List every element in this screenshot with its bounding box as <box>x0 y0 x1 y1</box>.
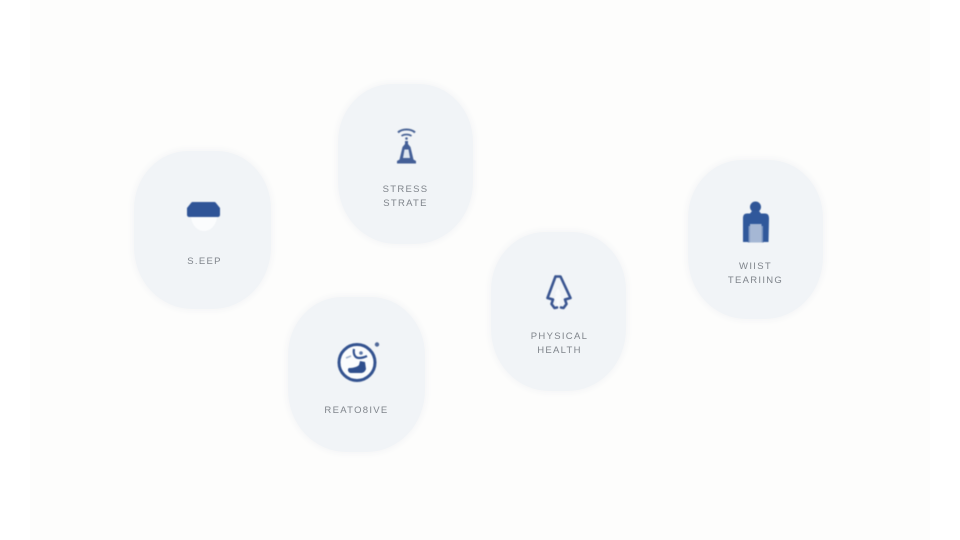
panel: stress <box>338 84 473 244</box>
icon: restorative <box>336 342 380 383</box>
label: restorative: REATO8IVE <box>324 405 389 416</box>
label: stress: STRATE <box>383 198 428 208</box>
panel: sleep <box>134 151 271 309</box>
panel: wrist training <box>688 160 823 319</box>
panel: restorative <box>288 297 425 452</box>
icon: physical health <box>546 274 572 310</box>
panel: physical health <box>491 232 626 391</box>
label: physical health <box>531 331 588 356</box>
label: wrist training: WIIST <box>739 261 772 272</box>
icon: sleep <box>186 201 221 230</box>
label: physical health: PHYSICAL <box>531 331 588 342</box>
label: wrist training <box>728 261 783 286</box>
label: stress: STRESS <box>383 184 428 195</box>
label: physical health: HEALTH <box>537 344 582 356</box>
label: wrist training: TEARIING <box>728 274 783 286</box>
icon: wrist training <box>742 200 770 244</box>
label: sleep: S.EEP <box>187 256 222 267</box>
label: stress <box>383 184 428 208</box>
icon: stress <box>396 128 417 164</box>
